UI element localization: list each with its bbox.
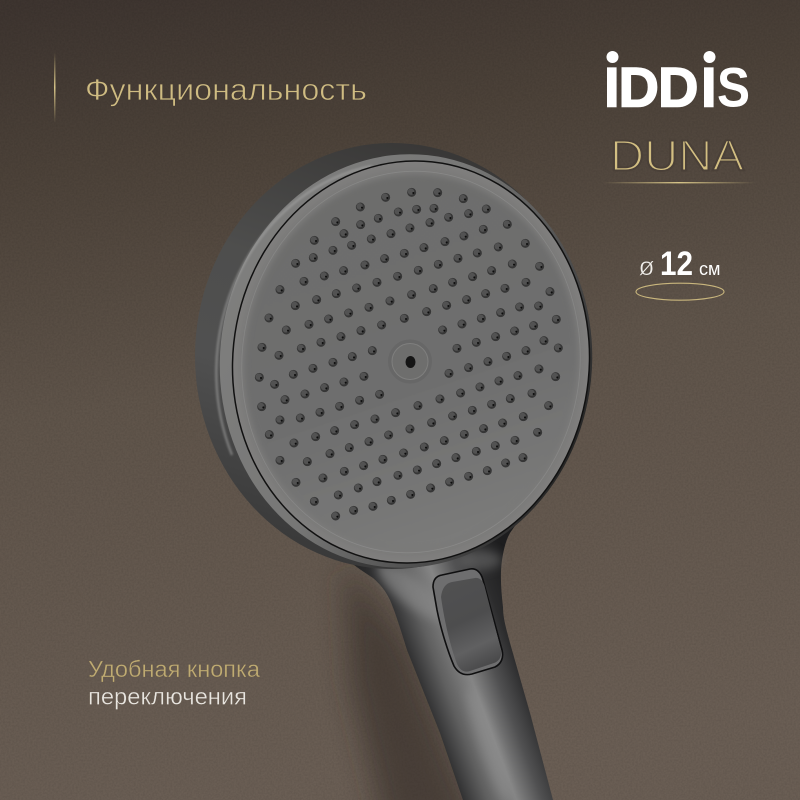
head inner plate — [226, 159, 596, 565]
head thin contour line — [223, 154, 599, 570]
centre hub — [388, 340, 432, 384]
heading: Функциональность — [85, 72, 367, 107]
head lip — [214, 144, 608, 580]
head rim — [199, 136, 613, 586]
brand logo: IDDI — [604, 56, 717, 118]
diameter label: ø — [638, 251, 655, 281]
head seam — [212, 142, 610, 582]
rim highlight — [216, 166, 372, 455]
nozzles — [259, 192, 560, 517]
diameter label: 12 — [660, 245, 693, 283]
button caption — [88, 656, 260, 710]
shower head illustration — [195, 136, 613, 800]
diameter ellipse icon — [636, 283, 724, 300]
head back shell — [195, 143, 589, 569]
brand logo: S — [717, 56, 750, 118]
series underline — [603, 182, 755, 183]
series name: DUNA — [610, 132, 745, 180]
switch button — [433, 569, 503, 675]
shadow cast by handle — [345, 565, 480, 800]
accent vertical line — [54, 52, 56, 123]
button caption: Удобная кнопка — [88, 656, 260, 682]
diameter label: см — [699, 258, 720, 279]
handle — [330, 500, 553, 800]
button caption: переключения — [88, 684, 247, 710]
diameter label — [638, 245, 720, 283]
